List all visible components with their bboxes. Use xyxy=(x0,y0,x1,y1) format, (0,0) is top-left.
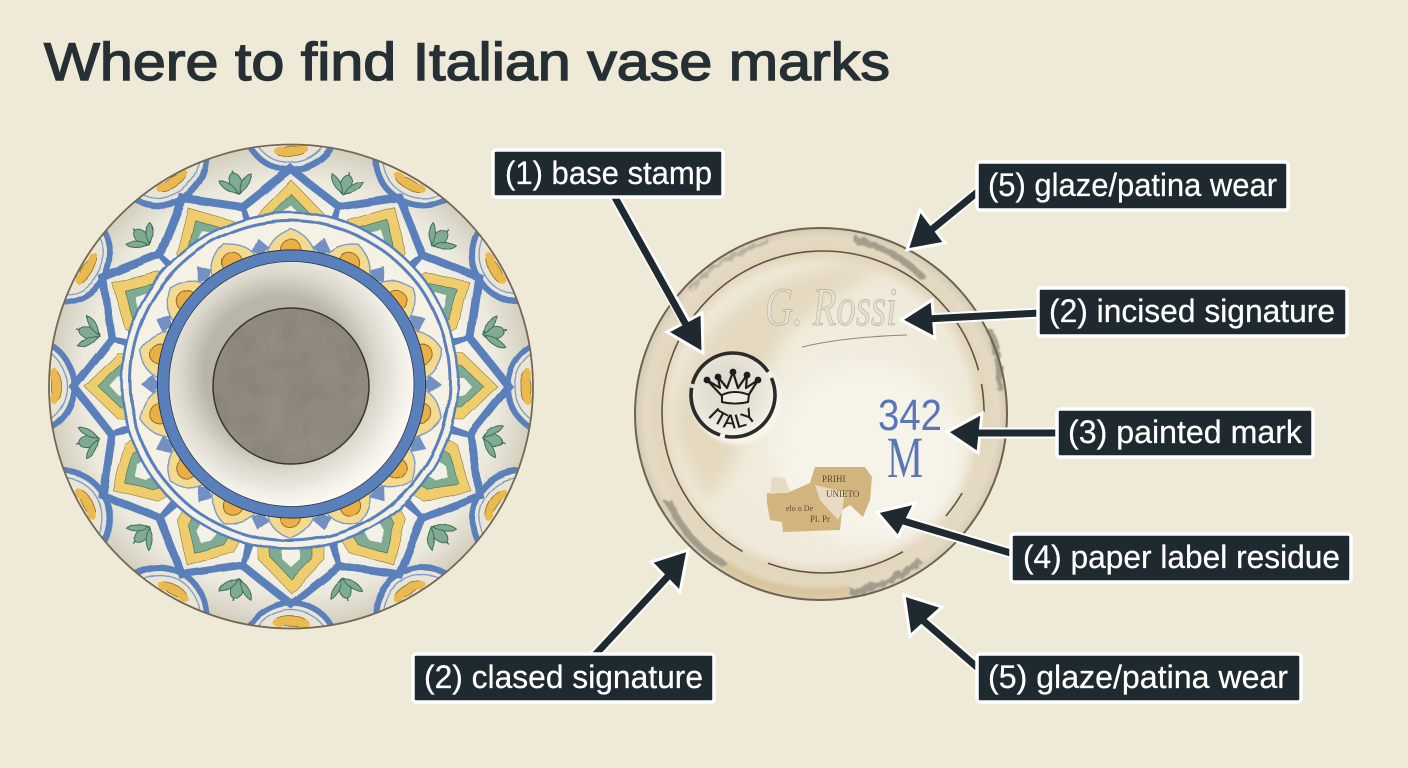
label: glaze wear top: (5) glaze/patina wear xyxy=(988,167,1277,203)
painted mark: M xyxy=(887,425,923,490)
icon: crown xyxy=(704,369,761,404)
wear patches xyxy=(668,240,1000,592)
paper label residue: PRIHI xyxy=(822,474,846,484)
incised signature: G. Rossi xyxy=(765,277,897,337)
paper label residue: elo o De xyxy=(786,504,814,513)
label: base stamp: (1) base stamp xyxy=(505,155,712,191)
white glaze in lower right xyxy=(775,365,965,545)
stamp: crown and ITALY xyxy=(689,351,780,446)
base inner ring xyxy=(662,251,984,573)
arrow: incised signature xyxy=(901,300,1040,338)
label: glaze wear bottom: (5) glaze/patina wear xyxy=(988,659,1288,695)
label: clased signature: (2) clased signature xyxy=(424,659,703,695)
label: painted mark xyxy=(1057,409,1313,457)
vase outer edge xyxy=(49,144,533,628)
paper label residue: UNIETO xyxy=(826,489,860,499)
arrow: glaze wear top xyxy=(907,190,980,250)
shoulder ring with petals xyxy=(122,213,458,549)
arrow: painted mark xyxy=(947,413,1060,453)
arrow: base stamp xyxy=(612,192,703,353)
tan patch at lower rim xyxy=(725,565,850,592)
incised signature xyxy=(765,277,907,347)
vase mouth rim xyxy=(158,250,426,518)
painted mark xyxy=(878,391,942,490)
label: glaze wear bottom xyxy=(977,654,1301,702)
illustration: vase base xyxy=(634,227,1008,601)
vase body with painted star pattern xyxy=(50,146,532,628)
arrow: glaze wear bottom xyxy=(904,595,978,668)
vase interior opening xyxy=(213,308,369,464)
label: incised signature: (2) incised signature xyxy=(1049,293,1335,329)
label: painted mark: (3) painted mark xyxy=(1068,414,1303,450)
paper label residue xyxy=(767,467,872,532)
painted mark: 342 xyxy=(878,391,942,440)
paper label residue: Pl. Pr xyxy=(810,514,830,524)
tan wash in upper left xyxy=(672,262,890,500)
arrow: clased signature xyxy=(594,550,688,656)
stamp text: ITALY xyxy=(708,407,754,428)
arrow: paper label xyxy=(877,503,1014,554)
base outer edge xyxy=(635,228,1007,600)
illustration: vase viewed from above xyxy=(0,74,604,699)
title: Where to find Italian vase marks xyxy=(44,33,890,92)
label: incised signature xyxy=(1038,288,1347,336)
label: paper label residue: (4) paper label residue xyxy=(1023,539,1340,575)
